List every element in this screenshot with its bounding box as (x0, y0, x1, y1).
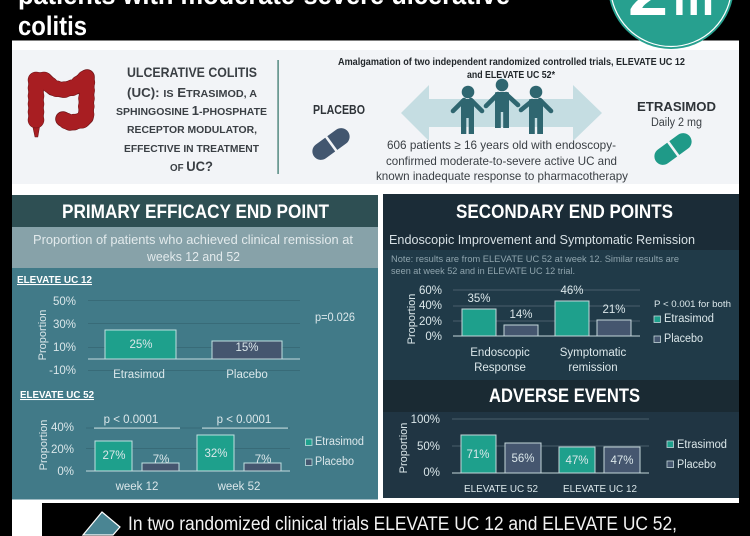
icon: colon (31, 77, 87, 137)
note: Note: results are from ELEVATE UC 52 at week 12. Similar results are (391, 254, 679, 265)
chart: ELEVATE UC 52: Placebo (315, 456, 354, 468)
chart: endoscopic and symptomatic: 20% (419, 316, 442, 328)
chart: ELEVATE UC 12: -10% (49, 365, 76, 377)
chart: ELEVATE UC 12: 15% (235, 342, 259, 354)
etrasimod label: ETRASIMOD (637, 99, 716, 114)
icon: pencil (83, 512, 120, 535)
chart: adverse events: Etrasimod (677, 439, 727, 451)
icon: patients (453, 79, 551, 134)
panel: study overview (12, 50, 739, 184)
title banner (0, 0, 750, 41)
chart: ELEVATE UC 12 (17, 274, 355, 381)
chart: adverse events (398, 414, 727, 495)
chart: endoscopic and symptomatic: 60% (419, 285, 442, 297)
chart: ELEVATE UC 12: Placebo (226, 369, 268, 381)
double arrow (401, 85, 602, 141)
question text: (UC): IS ETRASIMOD, A (127, 85, 257, 100)
etrasimod label: Daily 2 mg (651, 117, 702, 129)
heading: adverse events (383, 380, 739, 412)
chart: endoscopic and symptomatic: Placebo (664, 333, 703, 345)
chart: ELEVATE UC 52: 7% (153, 454, 169, 466)
chart: endoscopic and symptomatic: Proportion (406, 294, 418, 344)
chart: adverse events: Proportion (398, 423, 410, 473)
chart: ELEVATE UC 12: 50% (53, 296, 76, 308)
chart: endoscopic and symptomatic: Symptomatic (560, 347, 626, 359)
heading: adverse events: ADVERSE EVENTS (489, 386, 640, 407)
heading: secondary end points: Endoscopic Improvement and Symptomatic Remission (389, 232, 695, 247)
chart: ELEVATE UC 12: 30% (53, 319, 76, 331)
question text: ULCERATIVE COLITIS (127, 64, 257, 80)
conclusion text: In two randomized clinical trials ELEVATE UC 12 and ELEVATE UC 52, (128, 514, 677, 535)
chart: adverse events: 47% (610, 455, 634, 467)
chart: endoscopic and symptomatic: 40% (419, 300, 442, 312)
subheading (12, 227, 378, 268)
chart: ELEVATE UC 52: week 12 (115, 481, 158, 493)
question text: RECEPTOR MODULATOR, (127, 124, 257, 136)
chart: ELEVATE UC 52: Etrasimod (315, 436, 364, 448)
chart: endoscopic and symptomatic: Endoscopic (470, 347, 530, 359)
panel: primary efficacy end point (12, 195, 378, 500)
subheading: Proportion of patients who achieved clinical remission at (33, 232, 353, 247)
chart: ELEVATE UC 52: week 52 (217, 481, 260, 493)
chart: adverse events: 100% (411, 414, 440, 426)
chart: ELEVATE UC 52 (20, 389, 364, 493)
chart: ELEVATE UC 12: 10% (53, 342, 76, 354)
chart: endoscopic and symptomatic (406, 285, 731, 374)
chart: adverse events: 56% (511, 453, 535, 465)
icon: placebo pill (308, 124, 354, 164)
chart: endoscopic and symptomatic: Response (474, 362, 526, 374)
note (391, 254, 679, 277)
chart: ELEVATE UC 52: p < 0.0001 (104, 414, 158, 426)
chart: endoscopic and symptomatic: 35% (467, 293, 491, 305)
chart: adverse events: 47% (565, 455, 589, 467)
chart: ELEVATE UC 12: 25% (129, 339, 153, 351)
chart: ELEVATE UC 52: Proportion (38, 420, 50, 470)
note: seen at week 52 and in ELEVATE UC 12 trial. (391, 266, 575, 277)
footer: conclusion (42, 503, 750, 536)
question text: SPHINGOSINE 1-PHOSPHATE (116, 103, 267, 118)
chart: ELEVATE UC 12: p=0.026 (315, 312, 355, 324)
chart: ELEVATE UC 52: p < 0.0001 (217, 414, 271, 426)
chart: endoscopic and symptomatic: 14% (509, 309, 533, 321)
chart: endoscopic and symptomatic: 46% (560, 285, 584, 297)
chart: ELEVATE UC 12: Etrasimod (113, 369, 165, 381)
chart: endoscopic and symptomatic: Etrasimod (664, 313, 714, 325)
chart: adverse events: ELEVATE UC 12 (563, 483, 637, 495)
chart: endoscopic and symptomatic: P < 0.001 for both (654, 299, 731, 310)
logo: 2 minute badge (608, 0, 734, 49)
chart: endoscopic and symptomatic: remission (568, 362, 618, 374)
chart: ELEVATE UC 52: 0% (57, 466, 74, 478)
heading: secondary end points: SECONDARY END POINTS (456, 202, 673, 223)
chart: ELEVATE UC 12: Proportion (37, 310, 49, 360)
chart: ELEVATE UC 52: 27% (102, 450, 126, 462)
chart: adverse events: ELEVATE UC 52 (464, 483, 538, 495)
heading: primary efficacy: PRIMARY EFFICACY END POINT (62, 202, 329, 223)
chart: adverse events: 71% (466, 449, 490, 461)
trial description (338, 57, 685, 81)
chart: endoscopic and symptomatic: 21% (602, 304, 626, 316)
patient description: confirmed moderate-to-severe active UC and (386, 154, 617, 168)
chart: adverse events: 0% (423, 467, 440, 479)
subheading: weeks 12 and 52 (146, 249, 240, 264)
chart: ELEVATE UC 52: 20% (51, 444, 74, 456)
placebo label: PLACEBO (313, 103, 365, 117)
etrasimod label (637, 99, 716, 129)
question text: EFFECTIVE IN TREATMENT (124, 143, 260, 155)
question text: OF UC? (170, 158, 213, 174)
panel: secondary end points (383, 194, 739, 380)
chart: ELEVATE UC 52: ELEVATE UC 52 (20, 389, 94, 401)
chart: endoscopic and symptomatic: 0% (425, 331, 442, 343)
chart: ELEVATE UC 12: ELEVATE UC 12 (17, 274, 92, 286)
title banner: colitis (18, 11, 87, 41)
question text (116, 64, 267, 174)
chart: ELEVATE UC 52: 32% (204, 448, 228, 460)
icon: etrasimod pill (650, 129, 696, 169)
chart: ELEVATE UC 52: 7% (255, 454, 271, 466)
heading: secondary end points (383, 194, 739, 250)
chart: adverse events: 50% (417, 441, 440, 453)
trial description: and ELEVATE UC 52* (467, 70, 555, 81)
patient description: known inadequate response to pharmacotherapy (376, 169, 628, 183)
chart: ELEVATE UC 52: 40% (51, 422, 74, 434)
trial description: Amalgamation of two independent randomized controlled trials, ELEVATE UC 12 (338, 57, 685, 68)
patient description (376, 138, 628, 183)
patient description: 606 patients ≥ 16 years old with endoscopy- (387, 138, 616, 152)
heading: primary efficacy (12, 195, 378, 227)
panel: adverse events (383, 380, 739, 498)
chart: adverse events: Placebo (677, 459, 716, 471)
